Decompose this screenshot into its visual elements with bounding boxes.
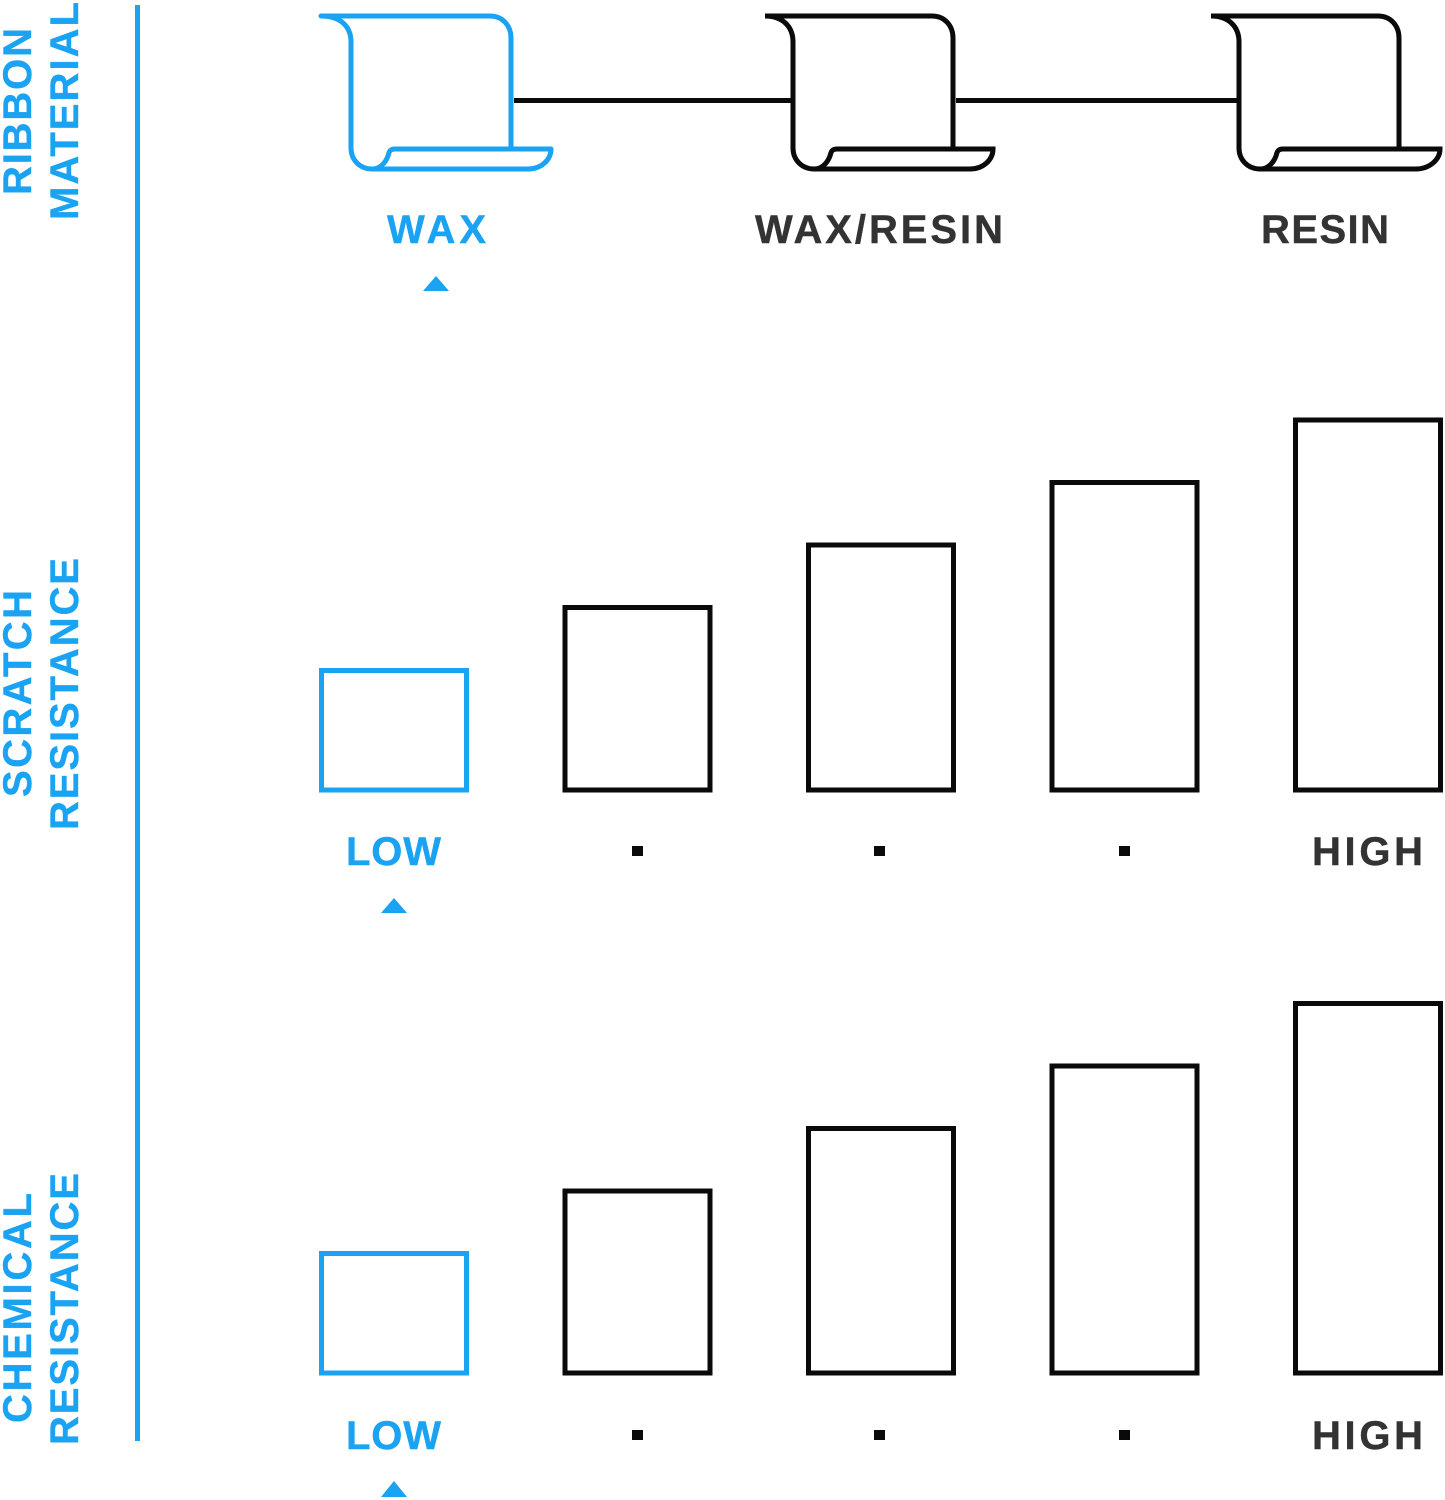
heading: chemical resistance: RESISTANCE <box>43 1173 87 1445</box>
icon: wax/resin ribbon <box>765 16 993 169</box>
scale dots <box>632 1430 1130 1440</box>
label: low: LOW <box>346 830 441 874</box>
row: ribbon material <box>0 2 1440 291</box>
label: resin: RESIN <box>1261 208 1389 252</box>
heading: chemical resistance <box>0 1173 87 1445</box>
label: high: HIGH <box>1312 830 1423 874</box>
label: wax: WAX <box>387 208 486 252</box>
heading: scratch resistance <box>0 558 87 830</box>
heading: scratch resistance: RESISTANCE <box>43 558 87 830</box>
bar chart: chemical levels <box>322 1004 1440 1373</box>
axis line <box>135 5 140 1441</box>
connector lines <box>514 98 1238 103</box>
row: chemical resistance <box>0 1004 1440 1497</box>
marker: low selected <box>381 1481 407 1497</box>
scale dots <box>632 846 1130 856</box>
marker: low selected <box>381 898 407 913</box>
row: scratch resistance <box>0 420 1440 913</box>
label: wax/resin: WAX/RESIN <box>755 208 1003 252</box>
heading: ribbon material <box>0 2 87 220</box>
label: low: LOW <box>346 1414 441 1458</box>
label: high: HIGH <box>1312 1414 1423 1458</box>
marker: wax selected <box>423 276 449 291</box>
heading: ribbon material: MATERIAL <box>43 2 87 220</box>
icon: resin ribbon <box>1211 16 1440 169</box>
icon: wax ribbon <box>321 16 551 169</box>
bar chart: scratch levels <box>322 420 1440 790</box>
